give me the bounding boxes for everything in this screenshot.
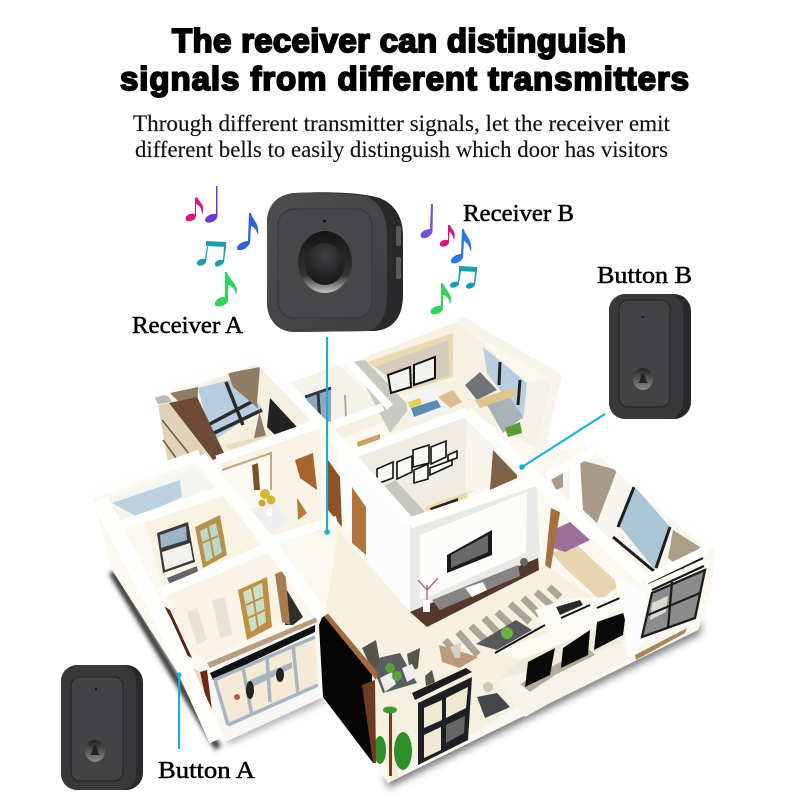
- title: The receiver can distinguish: [172, 22, 626, 59]
- icon: button B device: [609, 294, 691, 419]
- ground shadow: [226, 622, 702, 788]
- table: [476, 620, 532, 650]
- note: blue: [237, 213, 258, 250]
- sliding glass front: [207, 617, 323, 743]
- room: balcony bedroom on the right: [544, 453, 707, 600]
- floor plan illustration: [92, 318, 715, 788]
- label: Receiver A: Receiver A: [132, 313, 244, 339]
- room: left bedroom: [108, 470, 260, 587]
- tv console: [410, 558, 539, 627]
- dining set: [370, 653, 417, 693]
- sofa: [498, 643, 627, 717]
- black panels: [525, 648, 555, 687]
- icon: receiver device: [267, 192, 403, 332]
- icon: music notes left: [186, 186, 258, 306]
- label: Button A: Button A: [158, 758, 256, 784]
- beam above front window: [412, 668, 472, 700]
- room: bathroom: [287, 363, 390, 448]
- room doors: [295, 453, 317, 487]
- title: [120, 22, 689, 97]
- connector line: Button B: [519, 414, 605, 470]
- subtitle text: different bells to easily distinguish which door has visitors: [135, 137, 668, 162]
- note: blue: [451, 229, 471, 263]
- room: master bedroom: [353, 322, 557, 450]
- connector line: Receiver A: [324, 337, 330, 535]
- room: vanity room: [217, 425, 323, 540]
- note: purple: [421, 204, 433, 238]
- title: signals from different transmitters: [120, 60, 689, 97]
- label: Button B: Button B: [597, 263, 692, 289]
- note: magenta: [440, 225, 455, 247]
- black front window: [418, 677, 472, 765]
- icon: music notes right: [421, 204, 477, 314]
- chair and side table: [477, 693, 510, 718]
- wall tops: [92, 318, 712, 740]
- room: top-left bedroom: [152, 362, 310, 463]
- note: teal: [450, 266, 477, 289]
- brown door: [162, 617, 193, 707]
- carpet stripes: [445, 587, 560, 660]
- white wall column: [613, 573, 647, 662]
- label: Receiver B: Receiver B: [463, 201, 574, 227]
- building base: [92, 318, 715, 783]
- room: middle room with photo wall: [355, 412, 517, 523]
- note: purple: [205, 186, 218, 223]
- subtitle text: [133, 111, 671, 162]
- room: bottom-left bedroom: [162, 548, 323, 743]
- black exterior wall: [319, 610, 378, 763]
- kitchen counter: [494, 597, 623, 662]
- connector line: Button A: [176, 672, 182, 749]
- note: green: [431, 283, 451, 314]
- tv: [447, 530, 492, 573]
- icon: button A device: [61, 665, 143, 790]
- right end window: [642, 570, 705, 637]
- living area furniture: [362, 558, 705, 781]
- plants: [389, 700, 398, 781]
- note: teal: [197, 241, 226, 266]
- armchair: [439, 645, 478, 668]
- living room floor and TV wall: [295, 450, 640, 770]
- subtitle text: Through different transmitter signals, let the receiver emit: [133, 111, 671, 136]
- note: green: [215, 272, 237, 306]
- note: magenta: [186, 197, 203, 221]
